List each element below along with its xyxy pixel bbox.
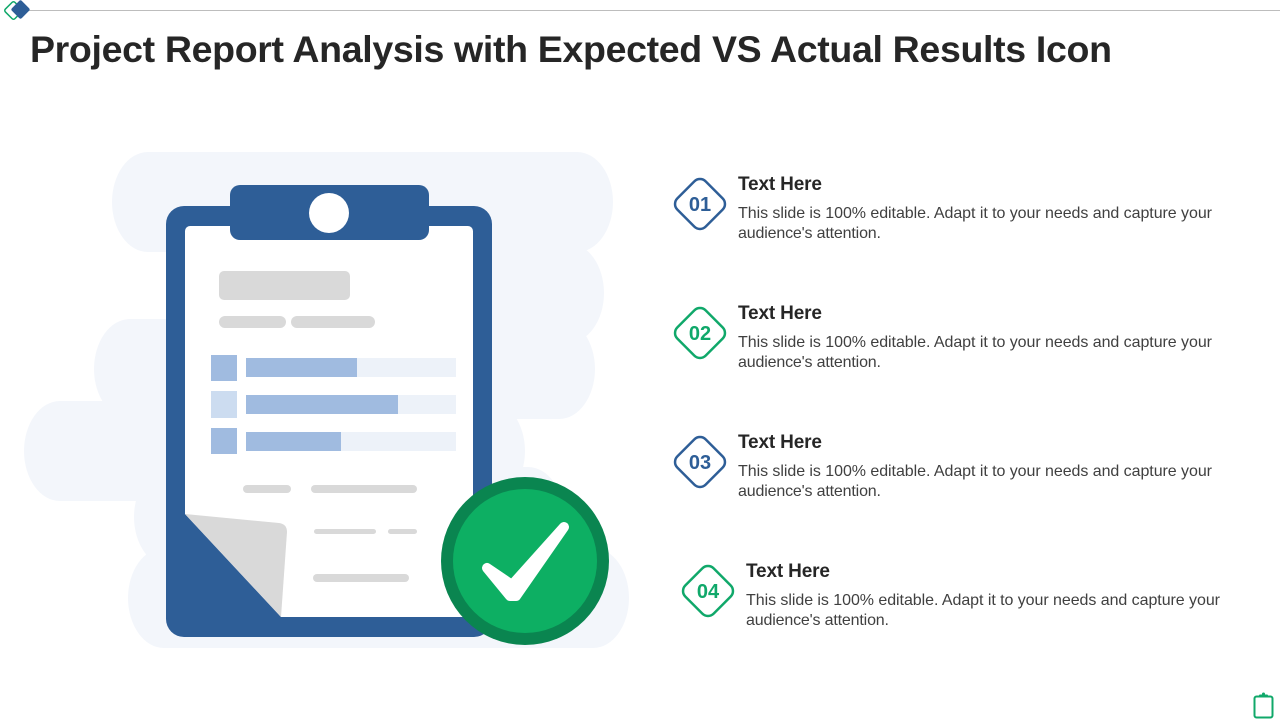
icon: green check badge [441, 477, 609, 645]
document heading placeholder [219, 271, 375, 328]
badge 02 [672, 305, 728, 361]
description 03: audience's attention. [738, 483, 881, 500]
paper sheet [185, 226, 473, 617]
folded paper corner [185, 514, 287, 617]
clipboard clip [230, 185, 429, 240]
heading 01: Text Here [738, 174, 822, 195]
heading 02: Text Here [738, 303, 822, 324]
icon: header logo diamonds [4, 0, 30, 20]
document text placeholders [243, 485, 417, 582]
item 01 [672, 174, 1213, 242]
badge 03: 03 [689, 452, 711, 474]
background cloud [24, 152, 629, 648]
icon: small clipboard [1254, 692, 1272, 718]
badge 04: 04 [697, 581, 720, 603]
description 01: This slide is 100% editable. Adapt it to your needs and capture your [738, 205, 1213, 222]
description 02: audience's attention. [738, 354, 881, 371]
heading 03: Text Here [738, 432, 822, 453]
header rule [28, 10, 1280, 11]
badge 03 [672, 434, 728, 490]
clipboard board [166, 206, 492, 637]
description 04: This slide is 100% editable. Adapt it to your needs and capture your [746, 592, 1221, 609]
title: Project Report Analysis with Expected VS Actual Results Icon [30, 28, 1112, 70]
description 04: audience's attention. [746, 612, 889, 629]
item 04 [680, 561, 1221, 629]
bar chart [211, 355, 456, 454]
description 01: audience's attention. [738, 225, 881, 242]
heading 04: Text Here [746, 561, 830, 582]
description 02: This slide is 100% editable. Adapt it to your needs and capture your [738, 334, 1213, 351]
badge 02: 02 [689, 323, 711, 345]
description 03: This slide is 100% editable. Adapt it to your needs and capture your [738, 463, 1213, 480]
badge 01: 01 [689, 194, 711, 216]
badge 01 [672, 176, 728, 232]
item 03 [672, 432, 1213, 500]
clipboard illustration [166, 185, 492, 637]
badge 04 [680, 563, 736, 619]
clip hole [309, 193, 349, 233]
item 02 [672, 303, 1213, 371]
